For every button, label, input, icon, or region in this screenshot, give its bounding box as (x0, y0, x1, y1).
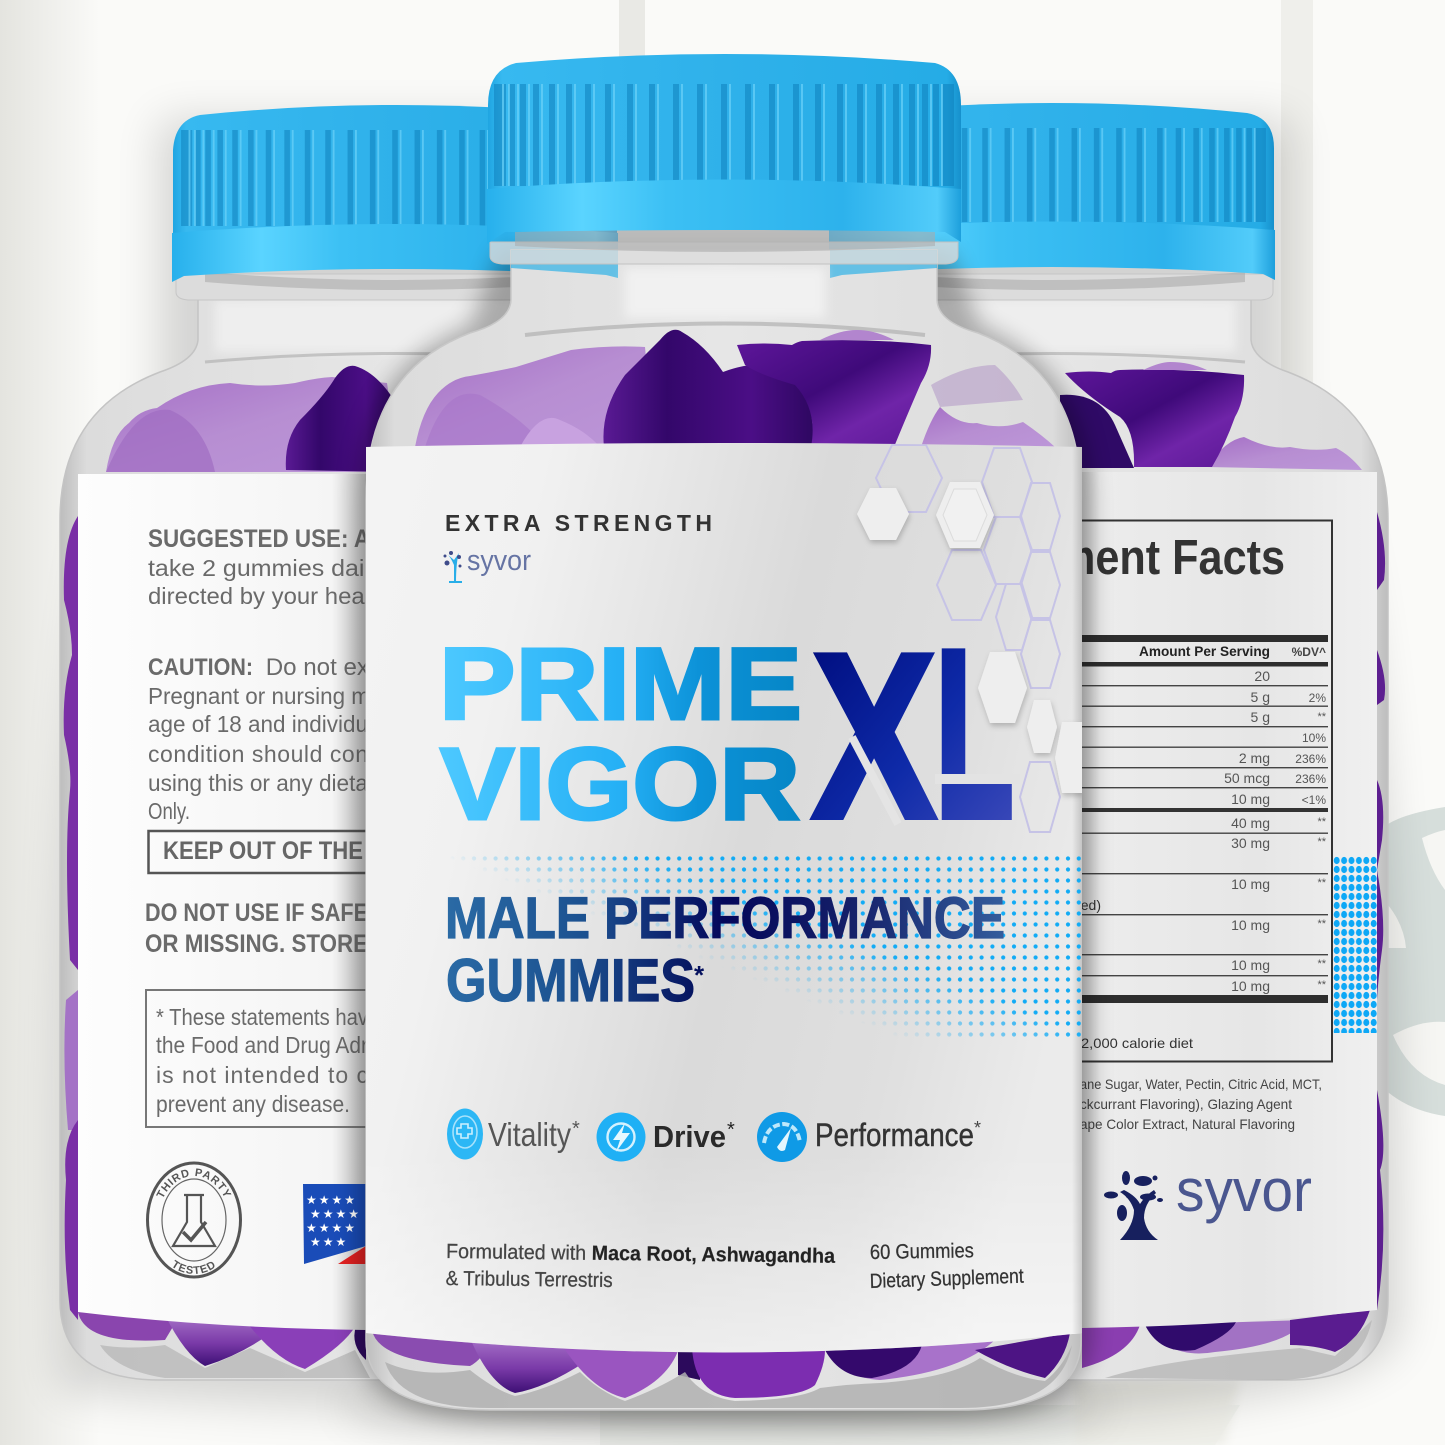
nutrition table: ed) (1081, 897, 1101, 913)
icon: speedometer (757, 1112, 807, 1162)
nutrition table: 2% (1309, 691, 1326, 705)
nutrition table: 2 mg (1239, 750, 1270, 766)
center bottle top gummies (415, 330, 1055, 447)
disclaimer box: prevent any disease. (156, 1091, 350, 1117)
hexagon decoration (857, 445, 1082, 832)
benefit: performance: * (974, 1118, 981, 1138)
nutrition table: ** (1317, 918, 1327, 930)
left bottle shoulder line (205, 354, 590, 362)
nutrition table: 10 mg (1231, 917, 1270, 933)
nutrition table: 10% (1302, 731, 1326, 745)
subtitle male performance gummies: GUMMIES (446, 947, 695, 1014)
usa flag (303, 1184, 366, 1264)
left bottle top gummies (106, 366, 400, 472)
left bottle cap (172, 105, 618, 282)
nutrition table: ** (1317, 816, 1327, 828)
caution block: CAUTION: Do not ex (148, 654, 369, 681)
do not use warning: DO NOT USE IF SAFE (145, 899, 368, 927)
right bottle cap (829, 103, 1275, 280)
suggested use block: SUGGESTED USE: A (148, 525, 370, 553)
right bottle neck ring (830, 274, 1273, 300)
left bottle glass (60, 290, 730, 1380)
nutrition table: 236% (1295, 772, 1326, 786)
third party tested badge: THIRD PARTY (156, 1168, 232, 1197)
usa flag: ★★★★ (306, 1193, 357, 1207)
nutrition table: %DV^ (1292, 645, 1326, 659)
left bottle neck ring (176, 274, 617, 300)
center neck ring (490, 242, 958, 264)
disclaimer box (145, 989, 366, 1128)
nutrition table: 50 mcg (1224, 770, 1270, 786)
nutrition table: 10 mg (1231, 978, 1270, 994)
nutrition table: 2,000 calorie diet (1081, 1035, 1193, 1051)
usa flag: ★★★ (310, 1235, 348, 1249)
nutrition table: <1% (1302, 793, 1326, 807)
nutrition table: 10 mg (1231, 791, 1270, 807)
syvor small logo: syvor (467, 545, 531, 577)
center bottle label (366, 443, 1082, 1352)
raised hexagons (857, 482, 1082, 793)
caution block: using this or any dieta (148, 770, 368, 796)
see-through back caps behind neck (511, 250, 937, 278)
benefit: vitality: Vitality (488, 1116, 571, 1153)
disclaimer box: is not intended to c (156, 1062, 368, 1088)
nutrition table: ** (1317, 877, 1327, 889)
left bottle side gummies (64, 516, 78, 970)
product name PRIME VIGOR (439, 627, 802, 841)
nutrition table: 236% (1295, 752, 1326, 766)
nutrition table: ** (1317, 979, 1327, 991)
nutrition table: 30 mg (1231, 835, 1270, 851)
benefit: performance (757, 1112, 981, 1162)
product name XL: X (812, 604, 936, 867)
nutrition table: ** (1317, 836, 1327, 848)
benefit: vitality: * (572, 1118, 580, 1140)
center bottle bottom glass (385, 1345, 1072, 1408)
caution block: Only. (148, 798, 190, 824)
left bottle lower side gummies (64, 990, 78, 1320)
syvor logo on right label: syvor (1176, 1157, 1312, 1224)
suggested use block: take 2 gummies dail (148, 555, 370, 581)
ingredients text (1080, 1076, 1322, 1132)
background leaf ring mark (1380, 807, 1445, 1116)
nutrition table: 20 (1254, 668, 1270, 684)
ingredients text: ckcurrant Flavoring), Glazing Agent (1080, 1096, 1292, 1112)
ingredients text: ape Color Extract, Natural Flavoring (1080, 1116, 1295, 1132)
subtitle male performance gummies: MALE PERFORMANCE (445, 886, 1005, 951)
benefit: vitality (447, 1108, 580, 1160)
right bottle top gummies (1060, 362, 1362, 470)
supplement facts title: Supplement Facts (913, 531, 1285, 585)
center front bottle (356, 54, 1092, 1418)
nutrition table: 10 mg (1231, 876, 1270, 892)
formula line: & Tribulus Terrestris (446, 1267, 613, 1292)
center shoulder line (525, 324, 925, 335)
keep out box (148, 831, 408, 873)
syvor logo on right label (1104, 1157, 1312, 1240)
center bottle glass body (366, 250, 1081, 1410)
caution block: Pregnant or nursing m (148, 683, 370, 709)
usa flag: ★★★★ (310, 1207, 361, 1221)
product name PRIME VIGOR: VIGOR (440, 727, 800, 841)
caution block: age of 18 and individu (148, 711, 368, 737)
left back bottle (59, 66, 770, 1410)
center bottle bottom gummies (372, 1330, 1070, 1398)
benefit: drive: Drive (653, 1119, 726, 1154)
right bottle side gummies (1377, 512, 1385, 1310)
formula line (446, 1240, 836, 1295)
left bottle neck glow (215, 300, 580, 352)
right back bottle (718, 103, 1388, 1380)
product name XL: L (936, 602, 1013, 865)
count and product type: Dietary Supplement (869, 1265, 1024, 1293)
do not use warning: OR MISSING. STORE (145, 930, 368, 958)
benefit: performance: Performance (815, 1117, 974, 1153)
nutrition table: ** (1317, 711, 1327, 723)
subtitle male performance gummies (445, 886, 1005, 1014)
caution block (148, 654, 370, 824)
supplement facts panel (1082, 520, 1333, 1132)
usa flag: ★★★★ (306, 1221, 357, 1235)
suggested use block: directed by your heal (148, 583, 370, 609)
blue dot band on right label (1333, 856, 1377, 1033)
nutrition table (1082, 635, 1328, 1050)
third party tested badge (146, 1162, 242, 1278)
XL stencil cuts (852, 737, 1020, 824)
nutrition table: 5 g (1251, 689, 1270, 705)
subtitle male performance gummies: * (694, 960, 705, 990)
left label text (145, 529, 366, 1264)
right bottle bottom gummies (1082, 1310, 1372, 1380)
do not use warning (146, 903, 366, 952)
icon: vitality (447, 1108, 483, 1160)
center bottle shadow over back bottles (356, 250, 1092, 1418)
nutrition table: Amount Per Serving (1139, 643, 1270, 659)
formula line: Formulated with Maca Root, Ashwagandha (446, 1240, 836, 1268)
nutrition table: ** (1317, 958, 1327, 970)
keep out box: KEEP OUT OF THE (163, 837, 363, 865)
ingredients text: ane Sugar, Water, Pectin, Citric Acid, MCT, (1080, 1076, 1322, 1092)
right bottle label (1082, 472, 1377, 1328)
halftone dot band (447, 853, 1081, 1043)
center neck glass (625, 268, 825, 318)
right bottle shoulder line (860, 354, 1245, 362)
center bottle cap (487, 54, 961, 244)
extra strength tagline: EXTRA STRENGTH (445, 510, 712, 536)
benefit: drive (596, 1112, 735, 1162)
left bottle label (78, 474, 366, 1330)
left bottle bottom gummies (78, 1312, 366, 1369)
count and product type: 60 Gummies (870, 1239, 974, 1264)
right bottle neck glow (865, 300, 1236, 352)
icon: lightning bolt (596, 1112, 646, 1162)
nutrition table: 10 mg (1231, 957, 1270, 973)
disclaimer box: the Food and Drug Adr (156, 1032, 368, 1058)
disclaimer box: * These statements hav (156, 1004, 368, 1030)
suggested use block (148, 525, 370, 609)
nutrition table: 5 g (1251, 709, 1270, 725)
product name PRIME VIGOR: PRIME (439, 627, 802, 741)
caution block: condition should con (148, 741, 368, 767)
hexagon outlines (876, 445, 1060, 832)
right bottle glass (718, 290, 1388, 1380)
nutrition table: 40 mg (1231, 815, 1270, 831)
count and product type (869, 1239, 1024, 1293)
benefit: drive: * (727, 1119, 735, 1141)
syvor small logo (444, 545, 531, 583)
tree icon (1104, 1171, 1163, 1240)
left bottle base glass (100, 1345, 370, 1378)
third party tested badge: TESTED (173, 1260, 214, 1274)
